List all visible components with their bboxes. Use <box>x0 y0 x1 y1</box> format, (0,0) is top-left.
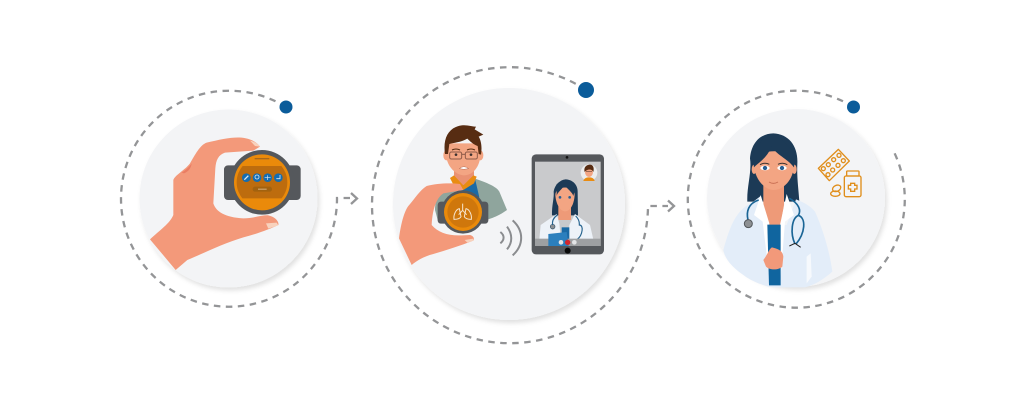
hand 2 <box>399 183 474 265</box>
panel: step 3 doctor and prescription <box>688 91 905 308</box>
arrow head 2 <box>668 200 674 212</box>
background circle 2 <box>393 88 625 320</box>
device 2 <box>438 190 488 234</box>
icon: wireless signal <box>500 220 521 255</box>
glasses <box>450 152 477 159</box>
dot 1 <box>280 100 292 114</box>
dashed ring 3 <box>688 91 905 308</box>
dot 2 <box>578 82 594 98</box>
patient <box>435 125 507 222</box>
picture-in-picture patient <box>581 164 597 181</box>
background circle 1 <box>140 110 318 288</box>
icon: lungs <box>454 204 471 219</box>
dashed ring 1 with arrow <box>121 91 350 307</box>
icon row <box>242 173 283 182</box>
device 1 <box>224 150 301 215</box>
panel: step 1 device in hand <box>121 91 357 307</box>
infographic: three step remote care flow <box>120 66 906 344</box>
dashed ring 2 with arrow <box>372 67 668 343</box>
white coat <box>723 196 832 287</box>
stethoscope <box>747 198 804 244</box>
arrow head 1 <box>351 193 357 204</box>
doctor <box>723 133 832 287</box>
icon: medication <box>818 149 861 197</box>
background circle 3 <box>707 109 885 287</box>
icon: hand holding device <box>150 137 278 270</box>
tablet <box>532 154 604 254</box>
remote doctor <box>539 179 593 239</box>
dot 3 <box>847 100 860 114</box>
panel: step 2 video consultation <box>372 67 674 343</box>
